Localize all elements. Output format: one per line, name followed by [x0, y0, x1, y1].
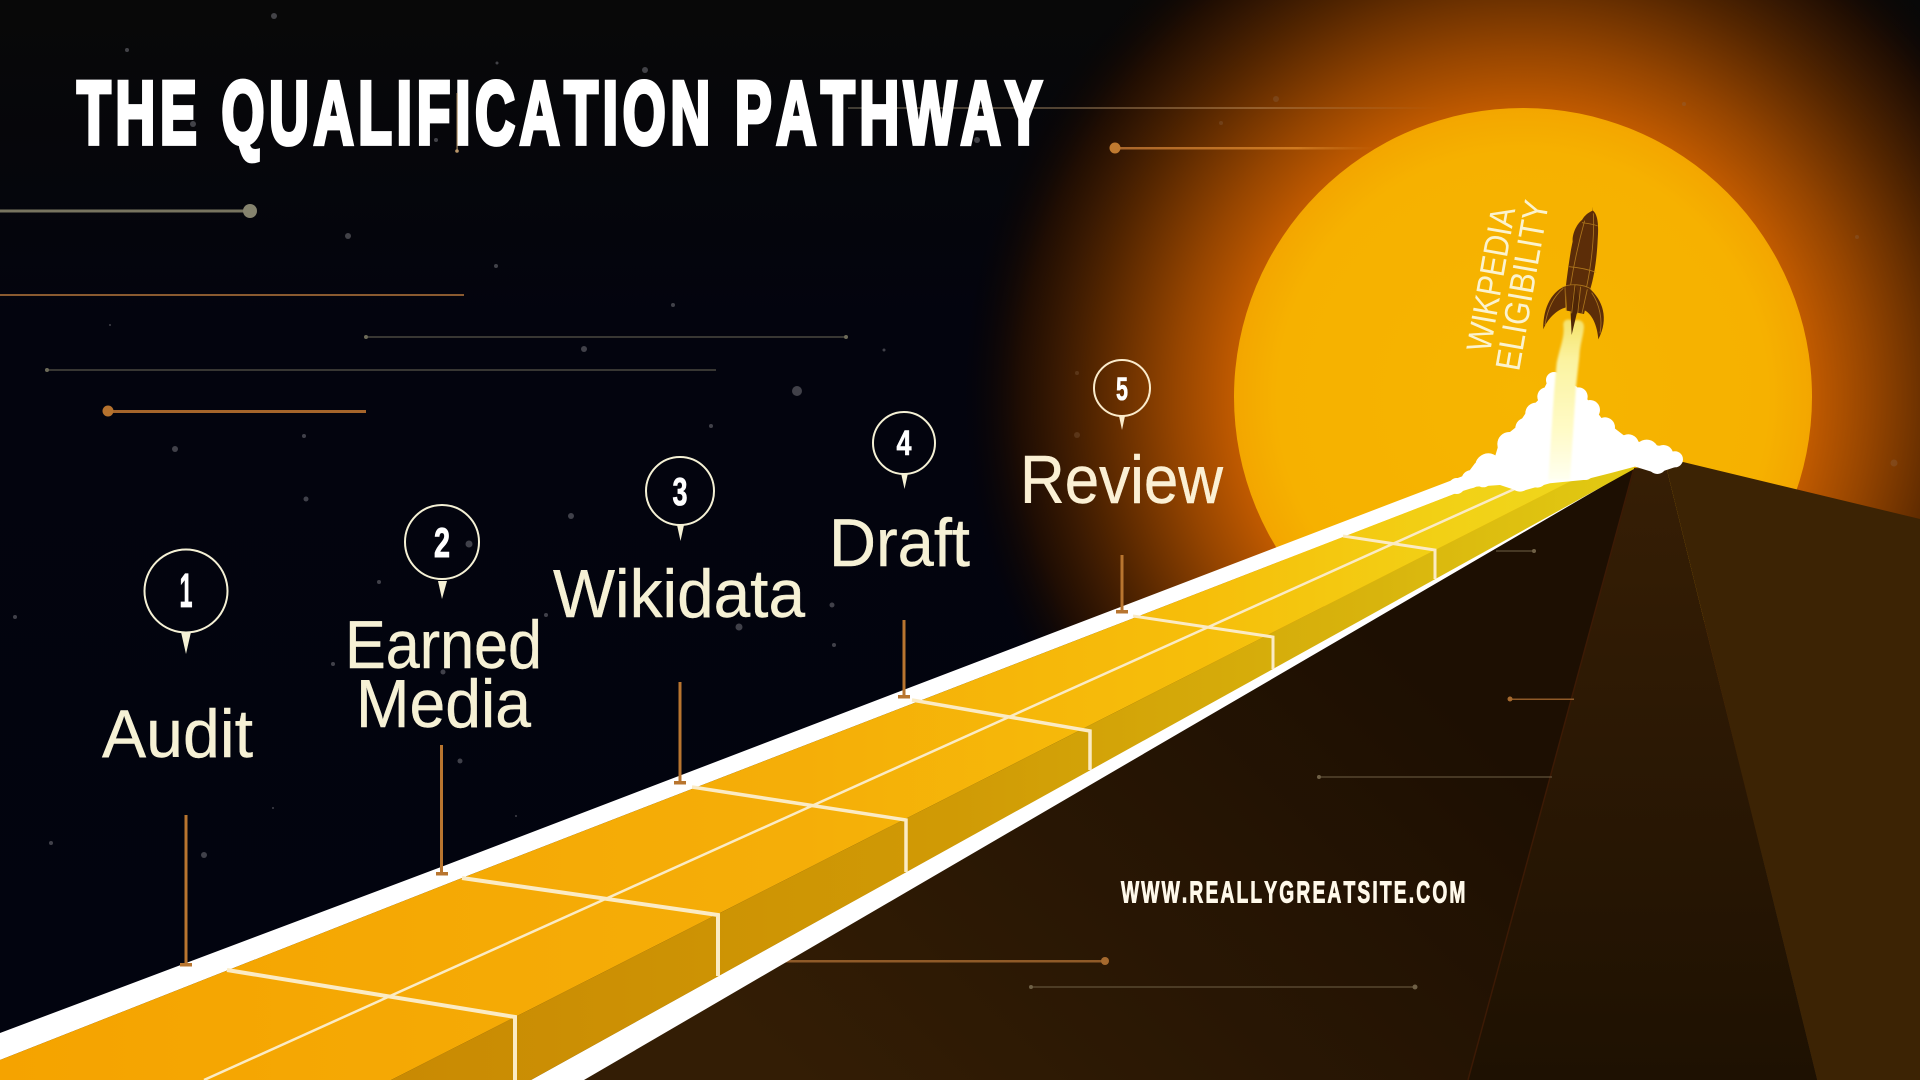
road lower white edge — [531, 468, 1634, 1080]
step 2: Earned Media — [345, 505, 542, 742]
step posts — [180, 555, 1128, 966]
pin 4: 4 — [896, 424, 912, 463]
pin 4 — [873, 412, 935, 489]
rocket exhaust flame — [1548, 319, 1584, 480]
label Audit: Audit — [102, 696, 253, 772]
ground speed lines — [784, 549, 1574, 990]
stars — [13, 13, 980, 858]
rocket centre fin — [1571, 285, 1581, 335]
pin 1: 1 — [180, 565, 192, 618]
step 5: Review — [1020, 360, 1224, 518]
road top face — [0, 449, 1634, 1080]
label Earned Media — [345, 607, 542, 742]
label Draft: Draft — [829, 505, 970, 581]
road top white edge — [0, 439, 1560, 1060]
pin 2 — [405, 505, 479, 599]
Wikipedia eligibility label — [1459, 197, 1557, 373]
label Earned Media: Media — [356, 666, 531, 742]
step 1: Audit — [102, 550, 253, 772]
road step dividers — [227, 536, 1435, 1080]
step 4: Draft — [829, 412, 970, 581]
speed lines — [0, 108, 1438, 416]
label Earned Media: Earned — [345, 607, 542, 683]
road centre line — [204, 482, 1530, 1080]
pin 5: 5 — [1116, 371, 1128, 407]
thin line across title — [455, 93, 459, 153]
website URL: WWW.REALLYGREATSITE.COM — [1121, 876, 1468, 910]
label Review: Review — [1020, 442, 1224, 518]
pin 3 — [646, 457, 714, 541]
rocket — [1543, 207, 1604, 339]
smoke cloud — [1449, 372, 1683, 495]
label Wikidata: Wikidata — [553, 556, 805, 632]
sun — [1234, 108, 1812, 686]
road side face — [391, 449, 1634, 1080]
Wikipedia eligibility label: ELIGIBILITY — [1488, 197, 1557, 373]
pin 3: 3 — [672, 471, 688, 514]
pin 2: 2 — [434, 519, 450, 566]
title: THE QUALIFICATION PATHWAY — [77, 63, 1047, 163]
rocket body — [1566, 207, 1598, 314]
pin 5 — [1094, 360, 1150, 430]
sun glow — [963, 0, 1920, 957]
ground — [500, 462, 1920, 1080]
rocket line detail — [1545, 213, 1601, 333]
Wikipedia eligibility label: WIKPEDIA — [1459, 203, 1523, 354]
faint stars over the glow — [1074, 96, 1898, 466]
step 3: Wikidata — [553, 457, 805, 632]
pin 1 — [144, 550, 228, 654]
pathway road — [0, 439, 1634, 1080]
rocket fins — [1543, 286, 1604, 339]
